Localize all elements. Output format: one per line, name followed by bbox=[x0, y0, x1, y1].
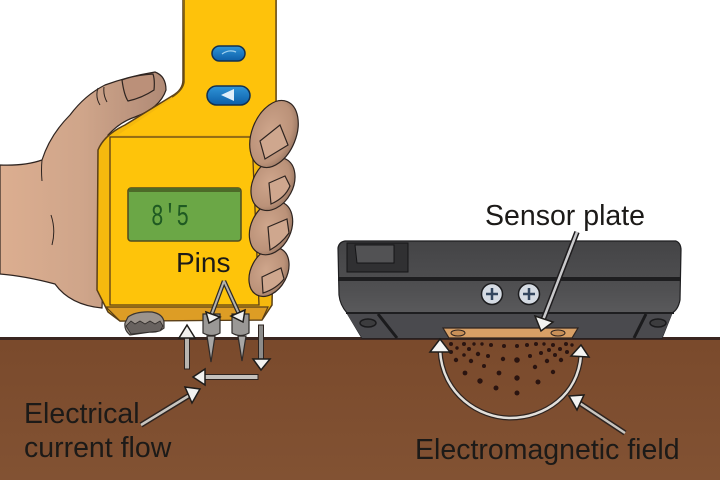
finger 1 bbox=[240, 93, 308, 175]
finger 4 bbox=[241, 241, 297, 303]
label: Electrical current flow bbox=[24, 398, 172, 464]
pointer arrow: electromagnetic field bbox=[569, 395, 625, 433]
moisture meter: yellow body bbox=[97, 0, 276, 321]
wood surface bbox=[0, 337, 720, 480]
pinless meter: dark body bbox=[338, 241, 681, 338]
screw left bbox=[482, 284, 502, 304]
finger 2 bbox=[242, 150, 304, 218]
label: Sensor plate: Sensor plate bbox=[485, 200, 645, 232]
screw right bbox=[518, 284, 540, 304]
sensor plate bbox=[443, 328, 578, 338]
pins bbox=[203, 314, 249, 362]
pin right bbox=[232, 314, 249, 361]
electromagnetic field arc bbox=[430, 339, 589, 418]
button: lower blue bbox=[207, 86, 250, 105]
adjustment knob bbox=[125, 312, 164, 335]
current flow arrow: up bbox=[179, 325, 195, 369]
arrows from Pins label to pins bbox=[206, 281, 245, 323]
LCD display: 8'5 bbox=[151, 200, 189, 235]
pin left bbox=[203, 314, 220, 362]
label: Electromagnetic field: Electromagnetic field bbox=[415, 434, 680, 466]
hand: palm and thumb bbox=[0, 72, 166, 308]
finger 3 bbox=[241, 194, 301, 262]
LCD display bbox=[128, 188, 241, 241]
pointer arrow: sensor plate bbox=[535, 232, 577, 331]
current flow arrow: left bbox=[193, 369, 258, 385]
label: Pins: Pins bbox=[176, 247, 230, 278]
label: Electrical current flow: current flow bbox=[24, 432, 172, 464]
electromagnetic field dots bbox=[449, 342, 574, 396]
power switch bbox=[347, 243, 408, 272]
fingers bbox=[240, 93, 308, 303]
pointer arrow: electrical current bbox=[141, 387, 200, 425]
current flow arrow: down bbox=[253, 325, 270, 370]
button: upper blue bbox=[212, 46, 245, 61]
label: Electrical current flow: Electrical bbox=[24, 398, 140, 430]
